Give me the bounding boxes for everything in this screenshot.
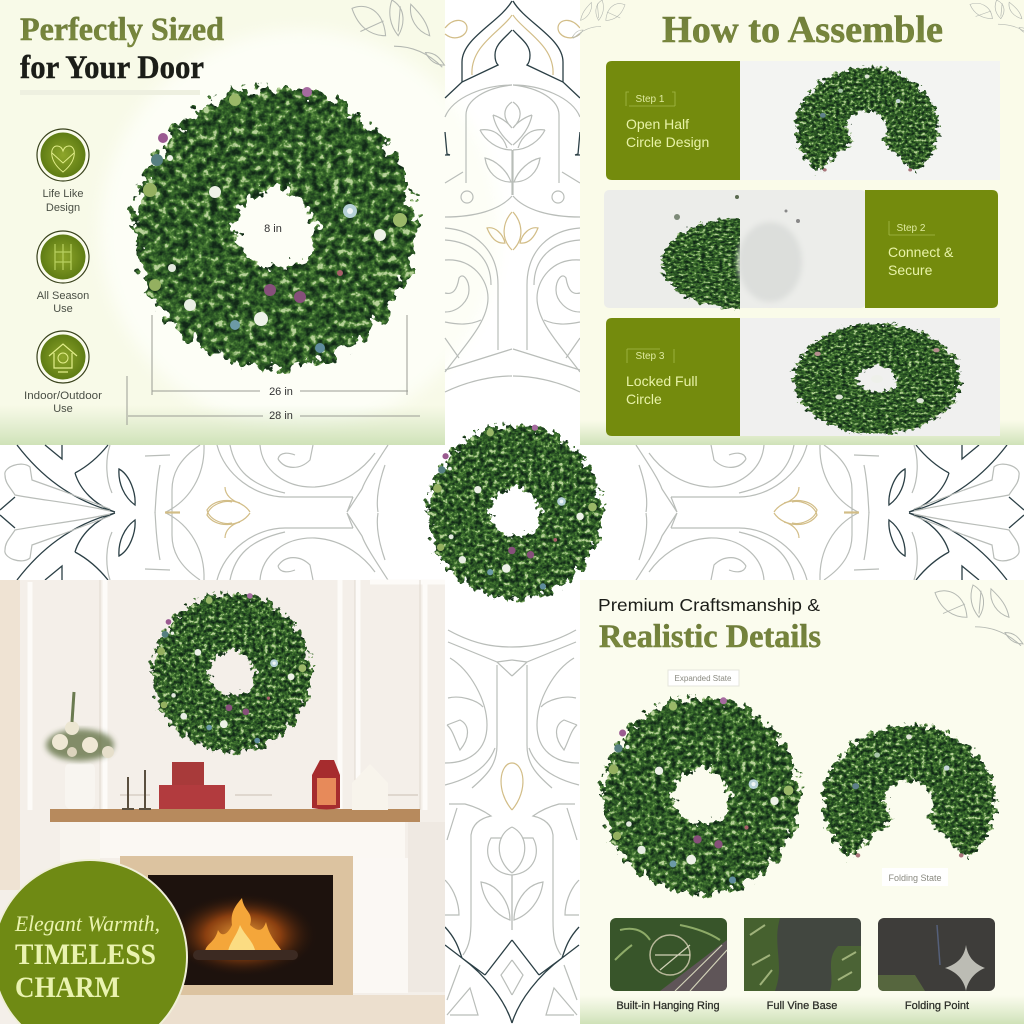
fireplace surround [120,856,353,995]
column right [353,858,408,993]
step 2 row: Connect & [888,244,954,260]
tag: folded state: Folding State [888,873,942,883]
leaf sprig decoration right [970,0,1024,35]
heading: for Your Door [20,50,204,86]
step 3 row: Locked Full [626,373,698,389]
label: indoor outdoor use: Use [53,403,73,415]
label: folding point: Folding Point [905,1000,969,1012]
heading: Premium Craftsmanship & [598,595,820,615]
wall moldings [30,580,445,810]
heading [598,595,821,655]
wreath: folded [852,734,964,857]
panel: how to assemble [572,0,1024,445]
heading [20,12,224,86]
step 2 row: Secure [888,262,933,278]
wreath: expanded [609,697,793,884]
icon: indoor outdoor [37,331,89,383]
leaf sprig decoration [935,585,1023,646]
red gift boxes [159,762,225,809]
badge: elegant warmth: TIMELESS [15,938,156,971]
floor [120,995,445,1024]
step 1 row [606,61,1000,180]
ornament: top column [445,1,580,392]
leaf sprig decoration left [572,0,625,38]
label: indoor outdoor use [24,390,102,415]
tag: expanded state [668,670,739,686]
label: indoor outdoor use: Indoor/Outdoor [24,390,102,402]
tag: expanded state: Expanded State [675,674,732,683]
badge: elegant warmth: CHARM [15,971,120,1004]
label: life like design: Life Like [43,188,83,200]
step 3 row [606,318,1000,436]
lantern [312,760,340,810]
badge: elegant warmth: Elegant Warmth, [14,911,160,936]
ornament: bottom column [445,630,579,1023]
step 3 row: Step 3 [636,351,665,362]
half-assembled wreath [660,218,740,310]
panel: perfectly sized [0,0,500,445]
white house [352,764,388,810]
curtain [0,580,20,890]
step 2 row [604,190,998,309]
flattened full wreath [814,345,940,413]
candlesticks [122,770,151,809]
dimension lines [127,315,420,425]
ornament: left row [0,445,388,580]
wall [0,580,445,1024]
step 1 row: Circle Design [626,134,709,150]
icon: life like design [37,129,89,181]
label: life like design: Design [46,202,80,214]
thumbnail: vine base [744,918,861,991]
wreath: centre [433,425,597,590]
leaf sprig decoration [352,0,444,67]
thumbnail: hanging ring [610,918,727,991]
wreath: main [143,87,407,353]
ghost motion blur [738,222,802,302]
step 1 row: Open Half [626,116,689,132]
label: all season use [37,290,89,315]
heading: Realistic Details [599,619,821,655]
right wall lower [408,822,445,992]
label: all season use: All Season [37,290,89,302]
wreath on wall [157,593,306,743]
badge: elegant warmth [0,859,188,1024]
half wreath [820,74,913,172]
tag: folded state [882,868,948,886]
panel: craftsmanship [580,580,1024,1024]
panel: room scene [0,580,445,1024]
label: 28 in: 28 in [269,410,293,422]
firebox [148,875,333,985]
label: 26 in: 26 in [269,386,293,398]
label: hanging ring: Built-in Hanging Ring [616,1000,720,1012]
fire [168,893,318,977]
label: wreath inner size: 8 in [264,223,282,235]
ornament: right row [636,445,1024,580]
step 2 row: Step 2 [897,223,926,234]
label: vine base: Full Vine Base [767,1000,837,1012]
heading: How to Assemble [662,9,943,51]
step 1 row: Step 1 [636,94,665,105]
label: life like design [43,188,83,214]
mantel [50,809,420,862]
label: all season use: Use [53,303,73,315]
step 3 row: Circle [626,391,662,407]
icon: all season [37,231,89,283]
heading: Perfectly Sized [20,12,224,48]
thumbnail: folding point [878,918,995,991]
flower vase [46,692,114,809]
